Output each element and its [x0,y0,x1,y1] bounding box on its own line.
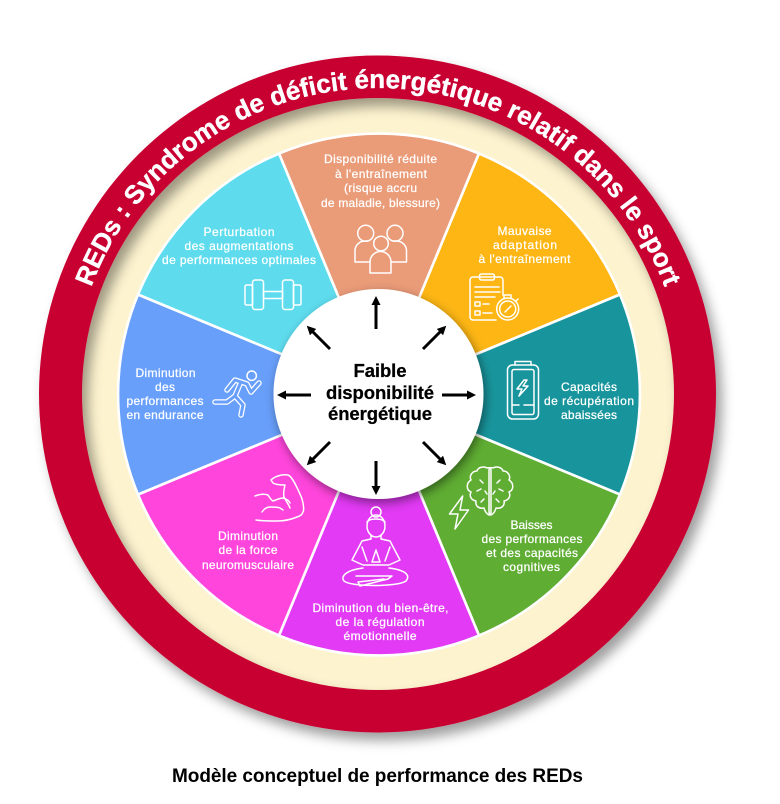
labels: training adaptation: adaptation [493,238,557,252]
icon: flexed bicep [255,475,304,521]
labels: strength: neuromusculaire [202,558,294,572]
labels: training adaptation: Mauvaise [498,224,552,238]
labels: endurance: des [155,380,175,394]
labels: endurance [126,366,204,422]
center label [326,360,434,424]
labels: endurance: performances [126,394,204,408]
center label: énergétique [328,403,432,424]
icon: brain and lightning [450,467,513,529]
labels: training availability: Disponibilité réduite [324,152,437,166]
labels: training adaptation [478,224,571,266]
labels: well-being [312,601,448,643]
labels: strength [202,529,294,572]
icon: low battery [508,362,538,419]
labels: training availability [321,152,440,210]
labels: training adaptation: à l'entraînement [478,252,571,266]
labels: cognitive: des performances [482,532,582,546]
labels: endurance: Diminution [136,366,196,380]
caption: Modèle conceptuel de performance des REDs [172,766,583,787]
labels: training availability: à l'entraînement [335,167,428,181]
labels: optimal gains: de performances optimales [162,253,316,267]
icon: meditating person [343,507,408,586]
segment: recovery [379,294,640,494]
arrows radiating from center [283,302,470,489]
cream ring [78,94,678,694]
segment: strength [138,394,379,636]
red outer ring [39,56,716,732]
labels: strength: de la force [218,543,278,557]
labels: recovery: de récupération [544,394,634,408]
icon: group of people [355,225,407,273]
labels: recovery: abaissées [561,408,617,422]
labels: strength: Diminution [218,529,278,543]
wheel of eight segments [118,134,640,655]
center label: Faible [354,360,406,381]
labels: optimal gains [162,225,316,267]
icon: clipboard with stopwatch [470,274,519,320]
labels: well-being: de la régulation [336,615,424,629]
segment: training availability [279,134,479,395]
labels: cognitive [482,518,582,574]
segment: endurance [118,294,379,494]
labels: recovery: Capacités [561,380,617,394]
labels: endurance: en endurance [126,408,204,422]
labels: optimal gains: Perturbation [204,225,274,239]
title on curved path: REDs : Syndrome de déficit énergétique relatif dans le sport [75,68,680,288]
labels: recovery [544,380,634,422]
labels: well-being: émotionnelle [344,629,417,643]
icon: runner [215,371,259,415]
labels: well-being: Diminution du bien-être, [312,601,448,615]
labels: optimal gains: des augmentations [184,239,294,253]
center label: disponibilité [326,382,434,403]
icon: dumbbell [245,280,301,310]
labels: training availability: (risque accru [344,181,417,195]
segment: well-being [279,394,479,655]
segment: optimal gains [138,154,379,394]
labels: cognitive: cognitives [503,560,560,574]
segment: cognitive [379,394,620,636]
labels: cognitive: Baisses [510,518,552,532]
center circle [274,289,484,499]
labels: cognitive: et des capacités [486,546,578,560]
segment: training adaptation [379,154,620,394]
labels: training availability: de maladie, blessure) [321,196,440,210]
